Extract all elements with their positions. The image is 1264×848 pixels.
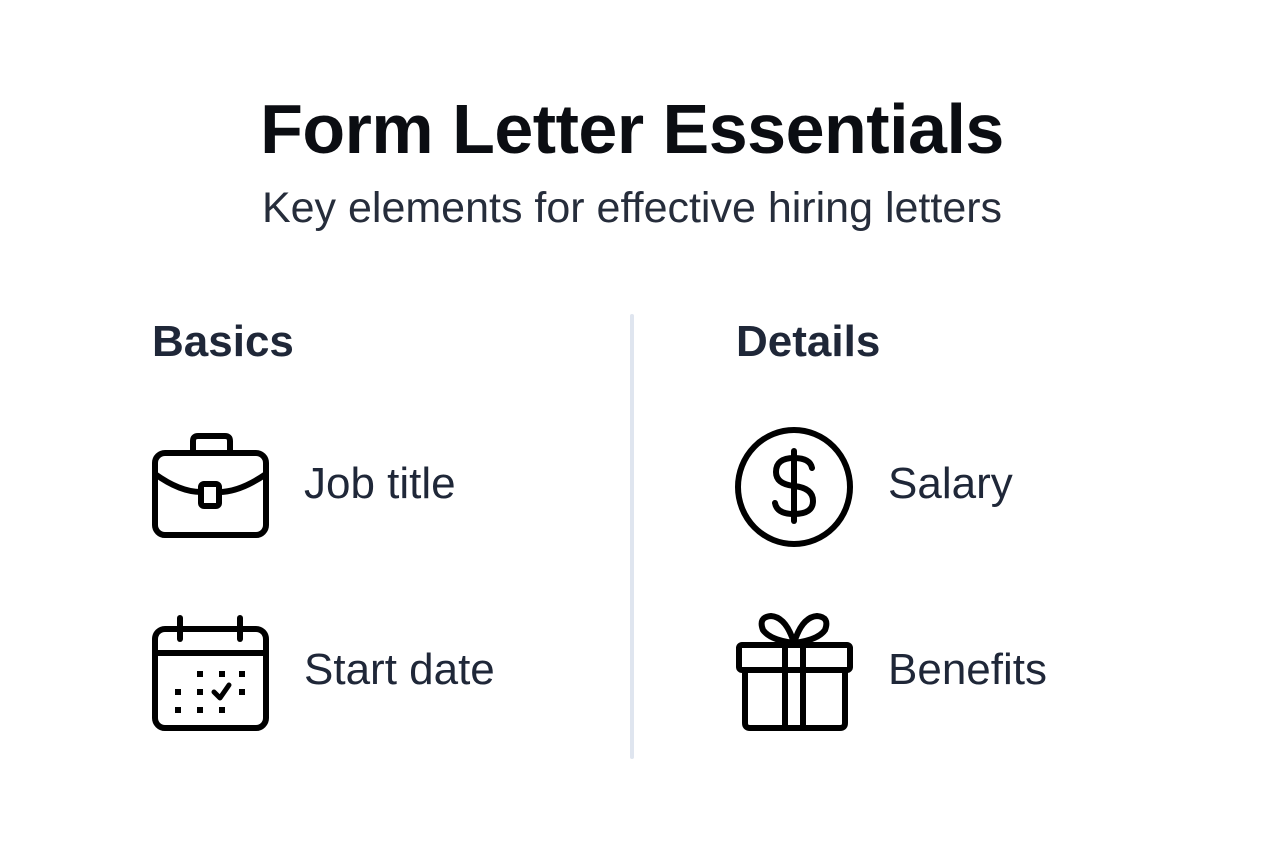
label: Start date: Start date [304, 645, 495, 694]
subtitle: Key elements for effective hiring letters [262, 184, 1002, 232]
heading: Details: Details [736, 317, 880, 366]
divider [630, 314, 634, 759]
label: Benefits: Benefits [888, 645, 1047, 694]
label: Salary: Salary [888, 459, 1013, 508]
label: Job title: Job title [304, 459, 456, 508]
heading: Basics: Basics [152, 317, 294, 366]
title: Form Letter Essentials [260, 90, 1004, 168]
